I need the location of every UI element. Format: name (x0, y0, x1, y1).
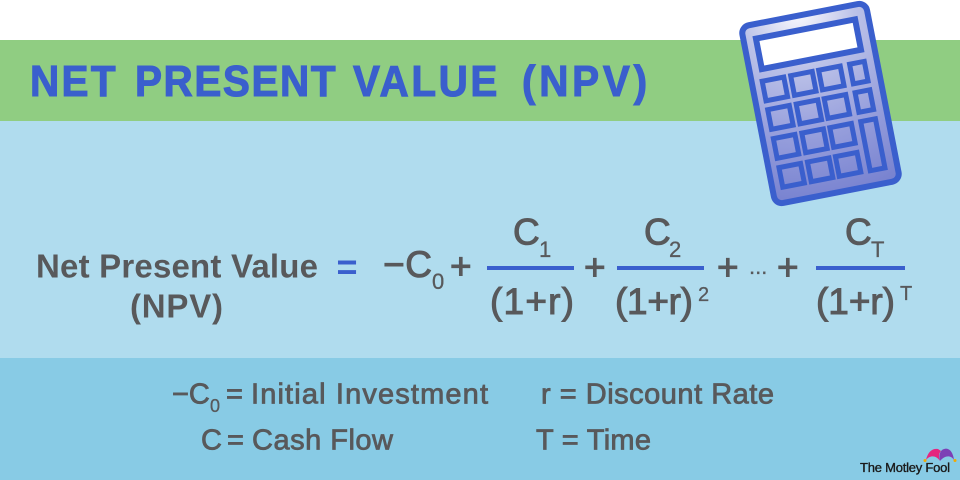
fraction 1: (1+r) (490, 281, 574, 322)
initial investment: 0 (210, 396, 220, 416)
title: NET (30, 56, 116, 105)
time: T = Time (536, 424, 651, 456)
fraction 1 (487, 212, 574, 322)
discount rate: r = Discount Rate (541, 378, 774, 410)
fraction 2: C (644, 212, 671, 252)
fraction 1: 1 (539, 237, 551, 262)
formula: ... (749, 254, 767, 279)
title (30, 56, 647, 105)
fraction T (816, 212, 912, 322)
fraction 2: (1+r) (615, 281, 693, 322)
initial term (383, 244, 472, 294)
fraction 1: C (513, 212, 540, 252)
title: VALUE (353, 56, 497, 105)
icon: calculator (741, 3, 900, 204)
formula: + (777, 247, 799, 288)
initial term: + (450, 246, 472, 287)
formula label (36, 248, 318, 324)
title: PRESENT (135, 56, 336, 105)
fraction T: C (845, 212, 872, 252)
logo: The Motley Fool: The Motley Fool (860, 460, 950, 475)
formula label: Net Present Value (36, 248, 318, 284)
cash flow: = (227, 424, 244, 456)
title: (NPV) (522, 56, 647, 105)
logo: The Motley Fool (860, 449, 956, 475)
initial term: −C (383, 244, 432, 285)
fraction 2: 2 (669, 237, 681, 262)
cash flow: C (201, 424, 222, 456)
fraction 2 (615, 212, 709, 322)
cash flow: Cash Flow (252, 424, 394, 456)
plus: + (584, 247, 606, 288)
initial term: 0 (432, 269, 444, 294)
fraction T: (1+r) (816, 281, 895, 322)
band: legend background (0, 358, 960, 480)
initial investment: Initial Investment (251, 378, 488, 410)
initial investment: = (226, 378, 243, 410)
fraction 2: 2 (698, 284, 709, 306)
plus ellipsis plus: + (717, 247, 739, 288)
fraction T: T (871, 237, 884, 262)
fraction T: T (900, 283, 912, 305)
equals sign: = (336, 246, 358, 287)
band: formula background (0, 121, 960, 358)
legend (172, 378, 774, 456)
formula (383, 212, 912, 322)
formula label: (NPV) (130, 288, 223, 324)
band: title background (0, 40, 960, 121)
initial investment (172, 378, 488, 416)
initial investment: −C (172, 378, 210, 410)
